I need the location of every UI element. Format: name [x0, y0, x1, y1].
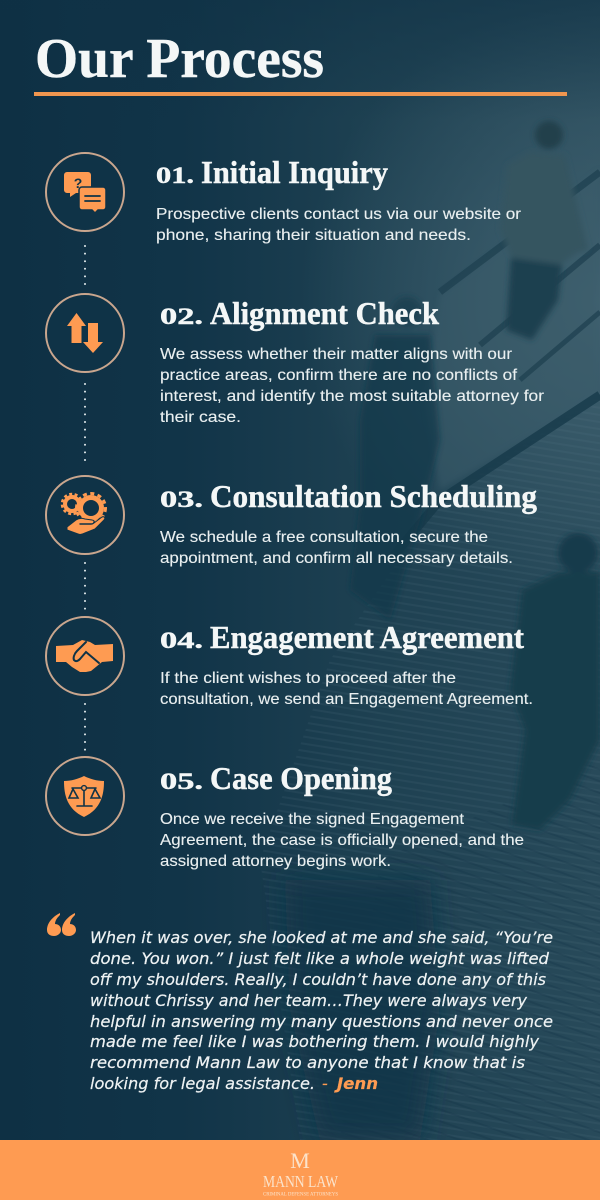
- step 3 text: [160, 529, 513, 567]
- step 2 text: [160, 346, 544, 426]
- step 3 heading: 03.: [160, 487, 203, 512]
- testimonial quote: looking for legal assistance.: [90, 1074, 315, 1093]
- step 2 text: interest, and identify the most suitable attorney for: [160, 388, 544, 405]
- testimonial quote: recommend Mann Law to anyone that I know that is: [90, 1053, 525, 1072]
- step 2 heading: Alignment Check: [210, 295, 439, 331]
- title underline: [34, 92, 567, 96]
- step 1 icon: speech bubbles: [46, 153, 124, 231]
- step 1 heading: 01.: [156, 163, 194, 188]
- step 3 icon: gears over hand: [46, 476, 124, 554]
- step 1 text: [156, 206, 521, 244]
- step 5 text: assigned attorney begins work.: [160, 853, 391, 870]
- step 4 heading: 04.: [160, 628, 203, 653]
- step 5 text: [160, 811, 524, 870]
- footer logo: M: [290, 1148, 310, 1173]
- step 1 heading: Initial Inquiry: [201, 154, 388, 190]
- step 5 text: Agreement, the case is officially opened, and the: [160, 832, 524, 849]
- step 1 icon: speech bubbles: ?: [74, 175, 82, 191]
- step 5 icon: shield with scales: [46, 757, 124, 835]
- step 2 heading: 02.: [160, 304, 203, 329]
- testimonial quote: -: [322, 1074, 328, 1093]
- figure back: [350, 297, 440, 620]
- step 2 icon: up and down arrows: [46, 294, 124, 372]
- footer bar: [0, 1140, 600, 1200]
- step 5 heading: Case Opening: [210, 760, 392, 796]
- step 4 text: If the client wishes to proceed after the: [160, 670, 456, 687]
- step 4 text: [160, 670, 533, 708]
- step 2 text: their case.: [160, 409, 241, 426]
- title: Our Process: [35, 28, 324, 90]
- testimonial quote: When it was over, she looked at me and she said, “You’re: [90, 928, 553, 947]
- testimonial quote: made me feel like I was bothering them. I would highly: [90, 1032, 540, 1051]
- icon: quotation marks: [47, 913, 76, 936]
- step 2 text: practice areas, confirm there are no conflicts of: [160, 367, 518, 384]
- step 4 heading: Engagement Agreement: [210, 619, 524, 655]
- testimonial quote: Jenn: [334, 1074, 378, 1093]
- step 3 text: appointment, and confirm all necessary details.: [160, 550, 513, 567]
- step 5 text: Once we receive the signed Engagement: [160, 811, 465, 828]
- testimonial quote: off my shoulders. Really, I couldn’t have done any of this: [90, 970, 546, 989]
- step 2 text: We assess whether their matter aligns with our: [160, 346, 512, 363]
- step 3 heading: Consultation Scheduling: [210, 478, 537, 514]
- testimonial quote: helpful in answering my many questions and never once: [90, 1012, 553, 1031]
- step 3 text: We schedule a free consultation, secure the: [160, 529, 488, 546]
- testimonial quote: without Chrissy and her team…They were always very: [90, 991, 528, 1010]
- step 4 text: consultation, we send an Engagement Agreement.: [160, 691, 533, 708]
- step 4 icon: handshake: [46, 617, 124, 695]
- footer logo: [263, 1148, 339, 1198]
- step 1 text: phone, sharing their situation and needs.: [156, 227, 471, 244]
- footer logo: CRIMINAL DEFENSE ATTORNEYS: [263, 1192, 338, 1198]
- step 5 heading: 05.: [160, 769, 203, 794]
- connector dots: [84, 246, 86, 752]
- testimonial quote: [90, 928, 553, 1093]
- step 1 text: Prospective clients contact us via our website or: [156, 206, 521, 223]
- footer logo: MANN LAW: [263, 1172, 339, 1191]
- testimonial quote: done. You won.” I just felt like a whole weight was lifted: [90, 949, 550, 968]
